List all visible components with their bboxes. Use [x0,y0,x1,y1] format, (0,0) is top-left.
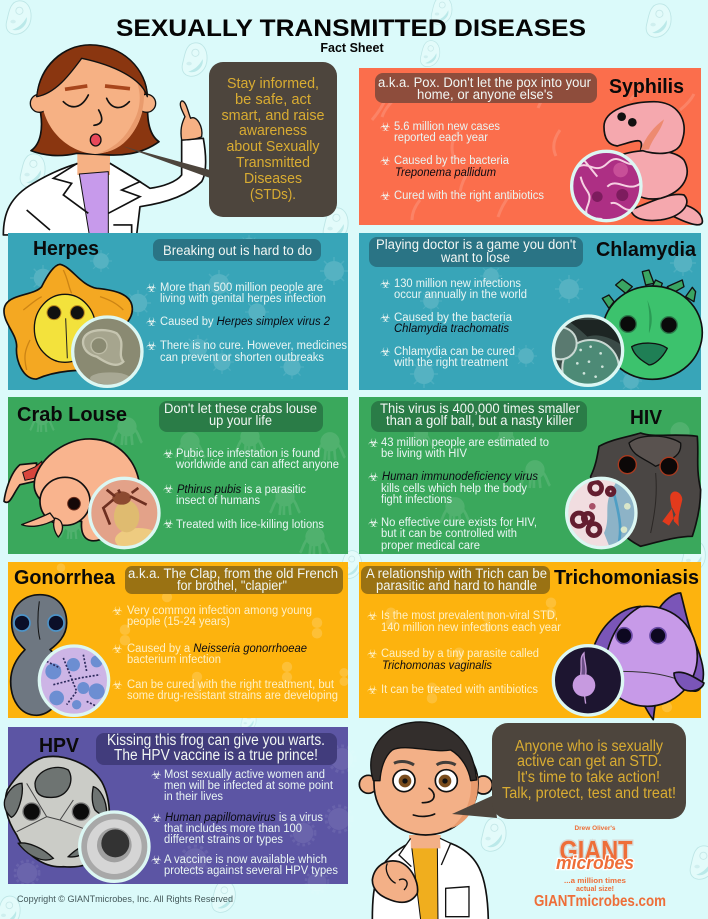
panel: hpv [4,727,355,893]
gonorrhea facts: bacterium infection [127,654,221,666]
hiv facts: No effective cure exists for HIV, [381,517,537,529]
chlamydia facts: Caused by the bacteria [394,312,513,324]
hpv name: HPV [39,734,79,757]
trichomoniasis facts: It can be treated with antibiotics [381,684,538,696]
callout: anyone can get an std [452,723,686,819]
gonorrhea facts: Can be cured with the right treatment, but [127,679,335,691]
syphilis name: Syphilis [609,75,684,98]
callout: stay informed: be safe, act [235,92,311,108]
icon: herpes virus [4,264,132,379]
logo: giantmicrobes: GIANTmicrobes.com [534,893,666,910]
illustration: female doctor [3,45,206,235]
subtitle: Fact Sheet [320,41,384,55]
copyright: Copyright © GIANTmicrobes, Inc. All Rights Reserved [17,894,233,905]
hpv tagline [96,732,337,765]
gonorrhea facts: ☣ [112,604,123,618]
syphilis facts: 5.6 million new cases [394,121,500,133]
chlamydia facts: occur annually in the world [394,289,527,301]
chlamydia tagline [369,237,583,267]
hiv facts: ☣ [368,516,379,530]
hpv facts: that includes more than 100 [164,823,302,835]
hpv facts: A vaccine is now available which [164,854,327,866]
icon: syphilis spirochete [604,102,702,225]
trichomoniasis facts: ☣ [367,683,378,697]
hpv facts: Most sexually active women and [164,769,325,781]
chlamydia facts: Chlamydia trachomatis [394,323,509,335]
crab louse facts: insect of humans [176,495,260,507]
hiv name: HIV [630,406,662,429]
chlamydia tagline: want to lose [440,250,510,265]
icon: trichomonas [594,593,704,720]
hpv facts: protects against several HPV types [164,865,338,877]
hpv facts [151,768,338,877]
herpes facts: ☣ [146,315,157,329]
herpes facts: More than 500 million people are [160,282,323,294]
hiv facts: Human immunodeficiency virus [382,471,538,483]
trichomoniasis facts: Is the most prevalent non-viral STD, [381,610,558,622]
micrograph: chlamydia [552,314,624,387]
hiv facts [368,436,549,552]
crab louse facts: worldwide and can affect anyone [175,459,339,471]
logo: giantmicrobes: ...a million times [564,878,626,885]
trichomoniasis facts: Caused by a tiny parasite called [381,648,539,660]
micrograph: hiv [566,478,637,550]
syphilis facts: ☣ [380,120,391,134]
gonorrhea tagline [125,566,343,594]
gonorrhea tagline: for brothel, "clapier" [177,578,287,593]
herpes tagline [153,239,321,261]
crab louse tagline: up your life [209,413,272,428]
trichomoniasis tagline: parasitic and hard to handle [376,578,537,593]
syphilis facts: ☣ [380,154,391,168]
panel: chlamydia [359,233,702,397]
chlamydia facts: Chlamydia can be cured [394,346,515,358]
trichomoniasis facts: ☣ [367,609,378,623]
icon: crab louse [4,439,140,541]
trichomoniasis tagline: A relationship with Trich can be [366,566,547,581]
panel: gonorrhea [8,562,348,718]
gonorrhea facts: people (15-24 years) [127,616,230,628]
panel: hiv [359,397,701,554]
hiv facts: kills cells which help the body [381,483,527,495]
chlamydia facts: with the right treatment [393,357,509,369]
icon: hpv [4,756,109,867]
syphilis facts: Treponema pallidum [395,167,496,179]
micrograph: trichomonas [553,646,623,715]
callout: anyone can get an std: Anyone who is sexually [515,738,663,755]
herpes facts: can prevent or shorten outbreaks [160,352,324,364]
hiv facts: but it can be controlled with [381,528,517,540]
callout: stay informed: smart, and raise [222,108,324,124]
callout: anyone can get an std: It's time to take action! [517,769,660,786]
chlamydia facts: ☣ [380,345,391,359]
hpv facts: in their lives [164,791,223,803]
herpes facts: ☣ [146,339,157,353]
chlamydia tagline: Playing doctor is a game you don't [376,237,576,252]
gonorrhea facts: Very common infection among young [127,605,312,617]
crab louse name: Crab Louse [17,403,127,426]
logo: giantmicrobes [534,825,666,910]
hpv facts: Human papillomavirus is a virus [165,812,323,824]
gonorrhea facts: ☣ [112,678,123,692]
hpv facts: ☣ [151,811,162,825]
micrograph: herpes [72,317,145,390]
syphilis tagline: a.k.a. Pox. Don't let the pox into your [378,75,591,90]
chlamydia facts: ☣ [380,311,391,325]
hiv tagline: than a golf ball, but a nasty killer [386,413,573,428]
crab louse tagline: Don't let these crabs louse [164,401,317,416]
icon: gonococcus [11,595,67,715]
crab louse facts: Pthirus pubis is a parasitic [177,484,306,496]
crab louse facts: ☣ [163,517,174,531]
syphilis facts: Caused by the bacteria [394,155,510,167]
herpes name: Herpes [33,237,99,260]
gonorrhea facts: ☣ [112,642,123,656]
callout: stay informed: about Sexually [226,139,320,155]
herpes facts [146,281,347,364]
herpes facts: Caused by Herpes simplex virus 2 [160,316,331,328]
gonorrhea tagline: a.k.a. The Clap, from the old French [128,566,338,581]
crab louse facts [163,447,339,531]
trichomoniasis name: Trichomoniasis [554,566,699,589]
hpv tagline: Kissing this frog can give you warts. [107,732,325,749]
hpv facts: different strains or types [164,834,283,846]
hiv tagline [371,401,587,432]
herpes facts: There is no cure. However, medicines [160,340,347,352]
chlamydia facts [380,277,527,369]
hpv facts: ☣ [151,853,162,867]
gonorrhea facts [112,604,338,702]
illustration: male doctor [359,722,492,919]
syphilis facts: ☣ [380,189,391,203]
syphilis facts: Cured with the right antibiotics [394,190,544,202]
callout: anyone can get an std: active can get an STD. [517,753,662,770]
gonorrhea name: Gonorrhea [14,566,116,589]
crab louse facts: Pubic lice infestation is found [176,448,320,460]
chlamydia facts: 130 million new infections [394,278,521,290]
hiv facts: fight infections [381,494,452,506]
crab louse facts: ☣ [163,447,174,461]
syphilis facts: reported each year [394,132,488,144]
hpv tagline: The HPV vaccine is a true prince! [114,747,318,764]
syphilis tagline: home, or anyone else's [417,87,553,102]
gonorrhea facts: Caused by a Neisseria gonorrhoeae [127,643,307,655]
callout: stay informed: awareness [239,123,307,139]
panel: syphilis [359,68,702,225]
callout: stay informed: Stay informed, [227,76,319,92]
hiv facts: proper medical care [381,540,480,552]
trichomoniasis tagline [361,566,550,594]
syphilis facts [380,120,544,203]
chlamydia name: Chlamydia [596,238,697,261]
micrograph: treponema [571,150,644,223]
callout: stay informed: (STDs). [250,187,296,203]
hiv facts: ☣ [368,436,379,450]
micrograph: gonorrhea [38,645,112,718]
trichomoniasis facts: Trichomonas vaginalis [382,660,492,672]
herpes facts: ☣ [146,281,157,295]
callout: stay informed: Diseases [244,171,302,187]
crab louse tagline [159,401,323,432]
panel: trichomoniasis [359,562,704,720]
crab louse facts: Treated with lice-killing lotions [176,519,324,531]
syphilis tagline [375,73,597,103]
chlamydia facts: ☣ [380,277,391,291]
trichomoniasis facts: ☣ [367,647,378,661]
micrograph: hpv [78,810,152,883]
trichomoniasis facts [367,609,561,697]
icon: hiv [591,433,701,546]
hpv facts: men will be infected at some point [164,780,334,792]
micrograph: crab louse [88,478,162,551]
herpes facts: living with genital herpes infection [160,293,326,305]
hpv facts: ☣ [151,768,162,782]
crab louse facts: ☣ [163,482,174,496]
callout: anyone can get an std: Talk, protect, test and treat! [502,785,676,802]
herpes tagline: Breaking out is hard to do [163,243,312,258]
callout: stay informed: Transmitted [236,155,310,171]
logo: giantmicrobes: actual size! [576,886,614,893]
gonorrhea facts: some drug-resistant strains are developing [127,690,338,702]
hiv facts: ☣ [368,470,379,484]
logo: giantmicrobes: GIANT [560,835,632,866]
hiv facts: be living with HIV [381,448,467,460]
callout: stay informed [122,62,337,217]
title: SEXUALLY TRANSMITTED DISEASES [116,15,586,42]
panel: crab louse [4,397,348,555]
logo: giantmicrobes: Drew Oliver's [574,825,616,832]
icon: chlamydia [602,270,702,379]
trichomoniasis facts: 140 million new infections each year [381,622,561,634]
panel: herpes [4,233,348,390]
hiv tagline: This virus is 400,000 times smaller [380,401,580,416]
hiv facts: 43 million people are estimated to [381,437,549,449]
logo: giantmicrobes: microbes [556,853,634,873]
